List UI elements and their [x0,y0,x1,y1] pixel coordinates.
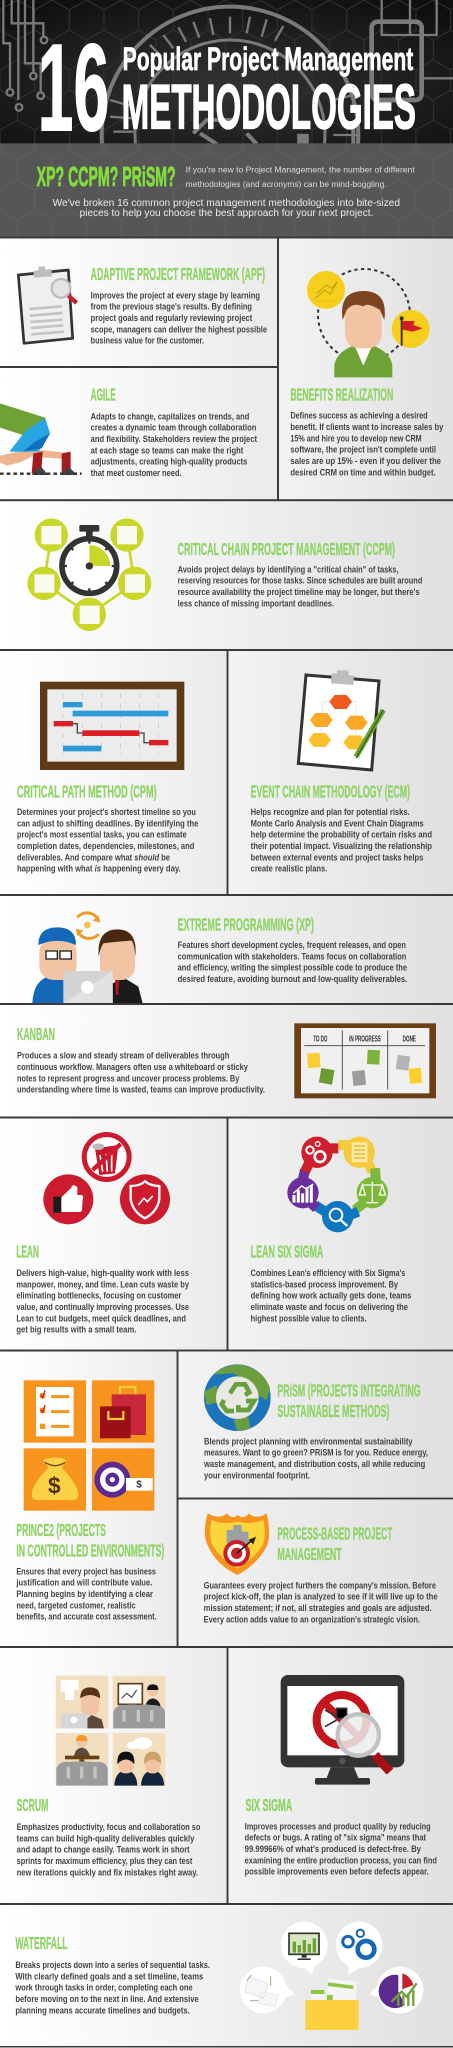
icon: monitor with bug and magnifier [281,1675,404,1785]
icon: folder with speech bubbles [240,1922,423,2030]
description: and flexibility. Stakeholders review the project [91,434,257,444]
intro band [0,143,453,237]
description: can adjust to shifting deadlines. By identifying the [17,818,198,828]
description: need, targeted customer, realistic [16,1600,136,1610]
description [204,1580,438,1624]
icon: four orange tiles [24,1380,154,1511]
description [17,807,198,874]
heading: CRITICAL PATH METHOD (CPM) [17,782,157,802]
description: With clearly defined goals and a set timeline, teams [15,1971,203,1981]
description: Helps recognize and plan for potential risks. [251,807,410,817]
intro summary: pieces to help you choose the best approach for your next project. [80,208,373,219]
heading: IN CONTROLLED ENVIRONMENTS) [16,1541,164,1561]
panel: Extreme Programming [0,896,453,1003]
description [245,1821,437,1877]
description: Planning begins by identifying a clear [16,1589,153,1599]
description: Lean to cut budgets, meet quick deadlines, and [16,1313,186,1323]
heading: PRINCE2 (PROJECTS [16,1520,106,1540]
description: justification and will contribute value. [16,1578,152,1588]
description: statistics-based process improvement. By [251,1279,399,1289]
description: project goals and regularly reviewing project [91,313,252,323]
description: eliminate waste and focus on delivering the [251,1302,408,1312]
description: Avoids project delays by identifying a "critical chain" of tasks, [178,564,399,574]
description: defining how work actually gets done, teams [251,1291,411,1301]
panel: Scrum: SCRUM [17,1795,48,1815]
description [290,411,444,477]
description: Produces a slow and steady stream of deliverables through [17,1051,230,1061]
intro text: methodologies (and acronyms) can be mind-boggling. [186,179,387,189]
description: notes to represent progress and uncover process problems. By [17,1073,240,1083]
description: project's most essential tasks, you can estimate [17,830,187,840]
heading: KANBAN [17,1024,55,1044]
description: eliminating bottlenecks, focusing on customer [16,1291,182,1301]
icon: shield with target [205,1513,269,1575]
description: business value for the customer. [91,336,204,346]
panel: Lean [0,1118,226,1349]
description: 99.99966% of what's produced is defect-free. By [245,1844,422,1854]
intro question heading: XP? CCPM? PRiSM? [37,161,176,192]
heading [277,1381,421,1421]
icon: four orange tiles: $ [48,1473,61,1499]
description: new iterations quickly and fix mistakes right away. [17,1867,198,1877]
intro summary: We've broken 16 common project management methodologies into bite-sized [53,198,400,209]
heading: LEAN SIX SIGMA [251,1242,324,1262]
panel: Waterfall [0,1905,453,2046]
description: and adapt to change easily. Teams work in short [17,1845,190,1855]
description: that meet customer need. [91,468,182,478]
description [251,807,432,874]
description: create realistic plans. [251,864,327,874]
description: work through tasks in order, completing each one [15,1983,193,1993]
heading: MANAGEMENT [277,1544,342,1564]
panel: PRiSM [179,1352,453,1497]
description: scope, managers can deliver the highest possible [91,324,267,334]
heading: EXTREME PROGRAMMING (XP) [178,915,314,935]
description: less chance of missing important deadlines. [178,598,334,608]
panel: Lean Six Sigma [229,1118,453,1349]
panel: Six Sigma [229,1648,453,1903]
circuit and gear artwork [3,0,453,263]
header: title banner [0,0,453,263]
description: Combines Lean's efficiency with Six Sigma's [251,1268,405,1278]
description: deliverables. And compare what should be [17,852,170,862]
description: value, and continually improving processes. Use [16,1302,189,1312]
description [203,1436,428,1480]
panel: Scrum [0,1648,226,1903]
description: Adapts to change, capitalizes on trends, and [91,411,250,421]
icon: kanban board: TO DO [313,1035,327,1044]
description: happening with what is happening every day. [17,864,181,874]
panel: Critical Chain Project Management [0,501,453,649]
description [251,1268,411,1323]
description: Ensures that every project has business [16,1566,156,1576]
description: continuous workflow. Managers often use a whiteboard or sticky [17,1062,249,1072]
intro summary [53,198,400,219]
panel: Process-Based Project Management [179,1500,453,1646]
heading: WATERFALL [15,1933,68,1953]
description [15,1960,210,2015]
panel: Benefits Realization [279,238,453,500]
intro text [186,165,415,189]
panel: Kanban [0,1005,453,1116]
description [17,1822,201,1877]
description: at each stage so teams can make the right [91,445,243,455]
description: Blends project planning with environmental sustainability [204,1436,413,1446]
description: before moving on to the next in line. And extensive [15,1994,199,2004]
description [178,940,407,984]
intro text: If you're new to Project Management, the number of different [186,165,415,175]
icon: five step cycle [287,1137,388,1232]
description: highest possible value to clients. [251,1313,367,1323]
description: benefits, and accurate cost assessment. [16,1612,157,1622]
icon: sprinter at starting line [0,403,82,475]
icon: kanban board: IN PROGRESS [349,1035,381,1044]
description: Breaks projects down into a series of sequential tasks. [15,1960,210,1970]
panel: PRINCE2 [0,1352,176,1646]
description: creates a dynamic team through collaboration [91,423,257,433]
description [91,290,267,346]
description: from the previous stage's results. By defining [91,302,252,312]
description: understanding where time is wasted, teams can improve productivity. [17,1085,265,1095]
panel: Agile: AGILE [91,385,116,405]
description: Emphasizes productivity, focus and collaboration so [17,1822,201,1832]
description [16,1268,190,1335]
icon: kanban board: DONE [403,1035,416,1044]
description [91,411,257,478]
description: Determines your project's shortest timeline so you [17,807,196,817]
description: desired feature, avoiding burnout and low-quality deliverables. [178,974,407,984]
description: manpower, money, and time. Lean cuts waste by [16,1279,190,1289]
panel: Lean: LEAN [16,1242,39,1262]
panel: Event Chain Methodology [229,651,453,894]
description: adjustments, creating high-quality products [91,457,247,467]
icon: red lean badges [43,1132,170,1224]
description [178,564,423,608]
description: planning means accurate timelines and budgets. [15,2005,190,2015]
icon: four orange tiles: $ [136,1480,142,1491]
description: teams can build high-quality deliverables quickly [17,1833,195,1843]
panel: Critical Path Method [0,651,226,894]
description: Delivers high-value, high-quality work with less [16,1268,189,1278]
panel: Adaptive Project Framework [0,238,277,367]
icon: gantt chart board [40,682,184,770]
numeral 16: 16 [38,20,109,158]
description: Improves the project at every stage by learning [91,290,260,300]
panel: Agile [0,368,277,500]
heading: SIX SIGMA [245,1795,293,1815]
heading [277,1524,393,1564]
icon: manager with chart and flag [307,269,430,377]
description: your environmental footprint. [204,1470,310,1480]
icon: four team scenes [56,1676,165,1786]
icon: pair programmers at laptop [32,913,143,1003]
icon: stopwatch with task chain [27,518,151,631]
description [16,1566,157,1622]
description: get big results with a small team. [16,1325,136,1335]
heading: ADAPTIVE PROJECT FRAMEWORK (APF) [91,264,265,284]
icon: recycling globe [204,1364,271,1431]
description: completion dates, dependencies, milestones, and [17,841,195,851]
icon: clipboard flowchart with pen [298,670,383,770]
description [17,1051,265,1095]
description: sprints for maximum efficiency, plus they can test [17,1856,192,1866]
icon: clipboard with magnifier [18,266,77,343]
heading [16,1520,164,1561]
icon: kanban board [294,1023,436,1098]
